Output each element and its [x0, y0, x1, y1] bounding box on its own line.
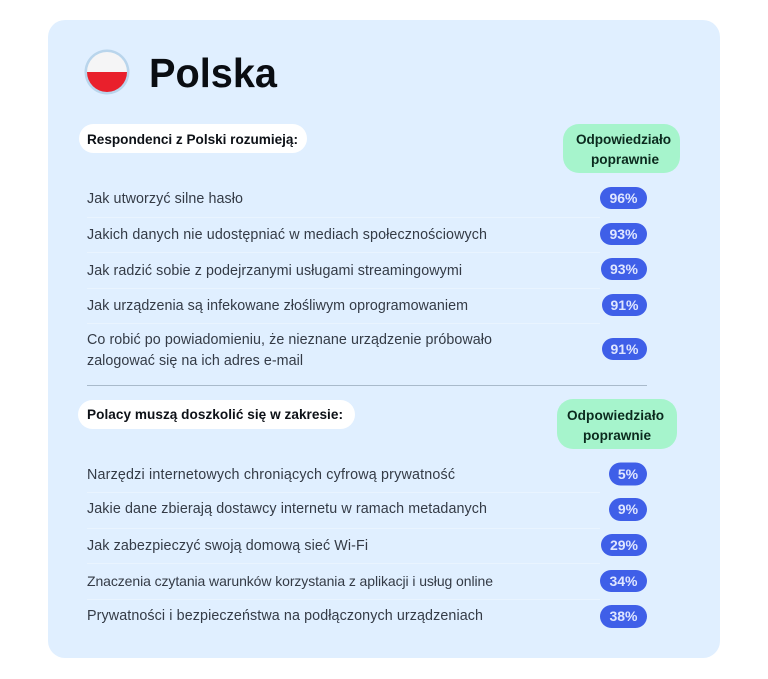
row: ISP metadata — [87, 498, 647, 521]
row: privacy tools: Narzędzi internetowych chroniących cyfrową prywatność — [87, 467, 455, 483]
column label: answered correctly: Odpowiedziało — [567, 408, 664, 423]
row: strong password: Jak utworzyć silne hasło — [87, 191, 243, 207]
row: connected devices: 38% — [609, 608, 638, 624]
column label: answered correctly: Odpowiedziało — [576, 132, 671, 147]
section heading: understood — [79, 124, 307, 153]
row: terms of service: 34% — [609, 573, 638, 589]
section heading: needs training — [78, 400, 355, 429]
icon: Polish flag — [84, 50, 130, 94]
section heading: needs training: Polacy muszą doszkolić się w zakresie: — [87, 407, 343, 422]
row: connected devices — [87, 605, 647, 628]
row: unknown device login: zalogować się na ich adres e-mail — [87, 353, 303, 369]
row: ISP metadata: Jakie dane zbierają dostawcy internetu w ramach metadanych — [87, 501, 487, 517]
row: privacy tools: 5% — [618, 466, 639, 482]
column label: answered correctly: poprawnie — [591, 152, 659, 167]
row: connected devices: Prywatności i bezpieczeństwa na podłączonych urządzeniach — [87, 608, 483, 624]
row: privacy tools — [87, 462, 647, 486]
row: terms of service: Znaczenia czytania warunków korzystania z aplikacji i usług online — [87, 573, 493, 589]
section heading: understood: Respondenci z Polski rozumieją: — [87, 132, 298, 147]
column label: answered correctly — [563, 124, 680, 173]
row: streaming services: 93% — [610, 261, 639, 277]
column label: answered correctly — [557, 399, 677, 449]
row: streaming services: Jak radzić sobie z podejrzanymi usługami streamingowymi — [87, 263, 462, 279]
title: Polska — [149, 50, 278, 96]
row: malware: Jak urządzenia są infekowane złośliwym oprogramowaniem — [87, 298, 468, 314]
row: unknown device login: 91% — [610, 341, 639, 357]
row: home Wi-Fi: Jak zabezpieczyć swoją domową sieć Wi-Fi — [87, 538, 368, 554]
row: unknown device login — [87, 332, 647, 369]
row: strong password: 96% — [609, 190, 638, 206]
row: social media data — [87, 223, 647, 245]
row: malware — [87, 294, 647, 316]
row: home Wi-Fi: 29% — [610, 537, 639, 553]
row: ISP metadata: 9% — [618, 501, 639, 517]
row: malware: 91% — [610, 297, 639, 313]
column label: answered correctly: poprawnie — [583, 428, 651, 443]
row: streaming services — [87, 258, 647, 280]
row: home Wi-Fi — [87, 534, 647, 556]
row: terms of service — [87, 570, 647, 592]
row: social media data: Jakich danych nie udostępniać w mediach społecznościowych — [87, 227, 487, 243]
row: unknown device login: Co robić po powiadomieniu, że nieznane urządzenie próbowało — [87, 332, 492, 348]
row: strong password — [87, 187, 647, 209]
row: social media data: 93% — [609, 226, 638, 242]
